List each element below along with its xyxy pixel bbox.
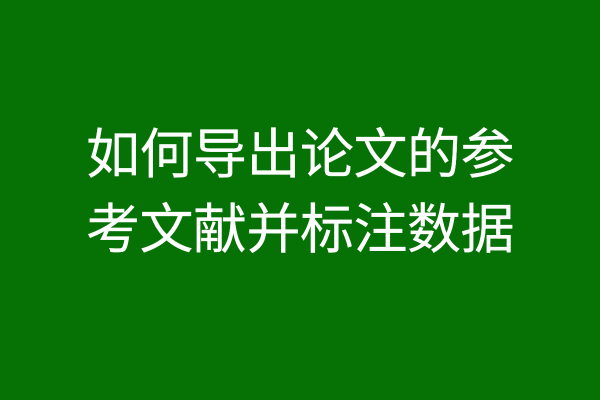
title: 如何导出论文的参 — [86, 125, 514, 185]
title: 考文献并标注数据 — [86, 200, 514, 260]
title — [86, 125, 514, 260]
